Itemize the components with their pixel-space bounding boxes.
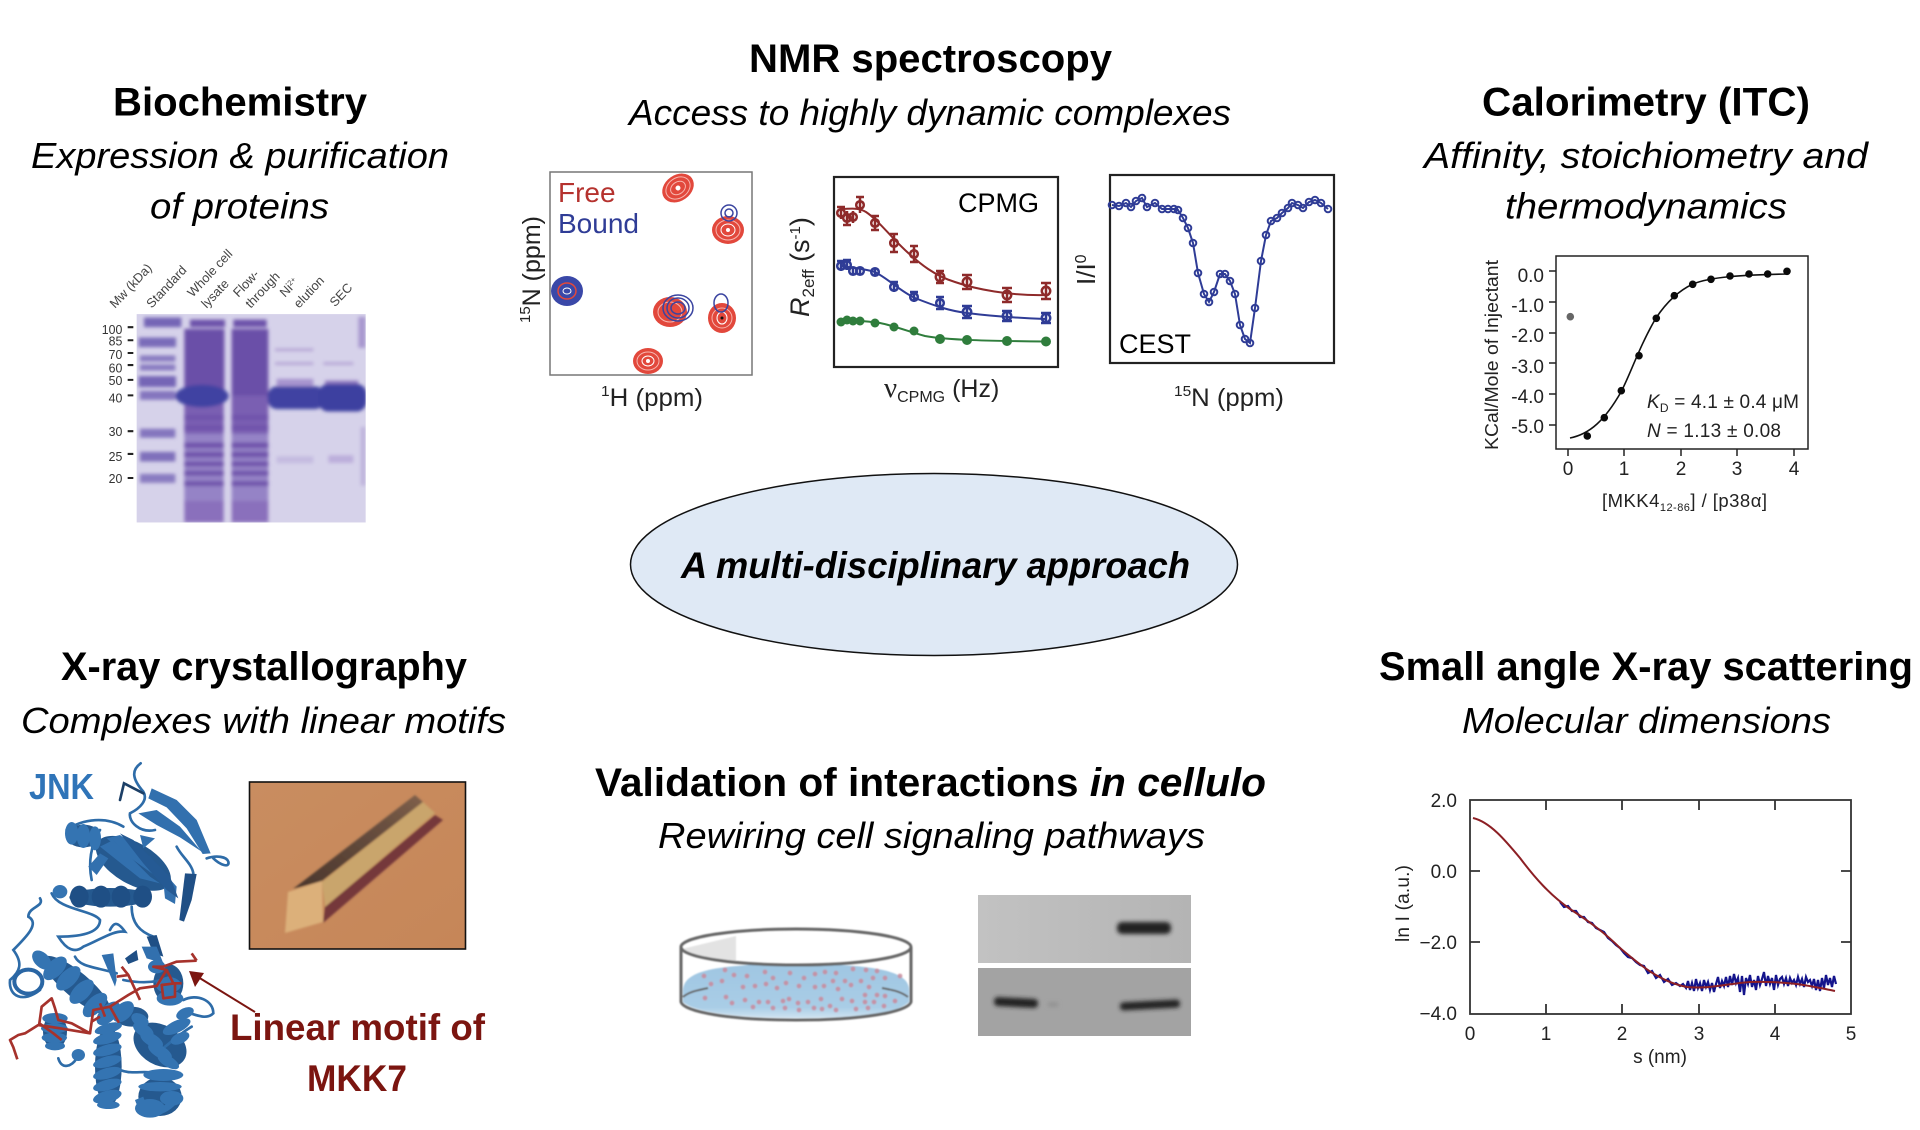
gel molecular-weight labels: 25 [109, 450, 122, 464]
legend: Free [558, 177, 616, 208]
y-axis tick labels: -3.0 [1511, 357, 1544, 378]
y-axis tick labels: −4.0 [1419, 1004, 1457, 1025]
gel lane labels: through [242, 269, 283, 311]
x-axis tick labels: 3 [1694, 1024, 1704, 1045]
legend: Bound [558, 208, 639, 239]
subtitle: rewiring: Rewiring cell signaling pathways [658, 815, 1205, 856]
x-axis tick labels: 2 [1676, 459, 1686, 480]
x-axis label: ν [884, 372, 897, 404]
gel lane labels: 2+ [285, 275, 298, 288]
x-axis tick labels: 0 [1465, 1024, 1475, 1045]
ellipse text: A multi-disciplinary approach [680, 545, 1190, 586]
y-axis tick labels: 0.0 [1518, 266, 1544, 287]
gel molecular-weight labels: 70 [109, 348, 122, 362]
gel lane labels: SEC [327, 280, 355, 310]
icon: petri dish with cells [681, 929, 911, 1020]
subtitle: molecular dimensions: Molecular dimensions [1462, 700, 1831, 741]
heading: X-ray crystallography: X-ray crystallography [61, 645, 468, 689]
x-axis label: (Hz) [945, 375, 999, 403]
linear motif label: Linear motif of [230, 1007, 486, 1048]
chart: CPMG: CPMG [958, 188, 1039, 218]
heading: NMR spectroscopy: NMR spectroscopy [749, 37, 1113, 81]
y-axis label: -1 [787, 226, 804, 239]
x-axis tick labels: 1 [1619, 459, 1629, 480]
heading: Biochemistry: Biochemistry [113, 80, 368, 124]
chart: CPMG [834, 177, 1058, 367]
gel lane labels [107, 246, 355, 311]
western blot [978, 895, 1191, 1036]
subtitle line 2: thermodynamics [1505, 186, 1787, 226]
y-axis label: KCal/Mole of Injectant [1481, 260, 1502, 450]
cells [702, 967, 902, 1012]
central ellipse [630, 474, 1238, 656]
gel image [102, 246, 367, 522]
y-axis tick labels: −2.0 [1419, 933, 1457, 954]
JNK label: JNK [29, 766, 94, 807]
subtitle: linear motifs: Complexes with linear motifs [21, 700, 506, 741]
gel lane labels: Mw (kDa) [107, 260, 155, 311]
blue series [837, 260, 1051, 323]
x-axis tick labels: 5 [1846, 1024, 1856, 1045]
gel molecular-weight labels: 60 [109, 361, 122, 376]
peptide sticks [10, 953, 197, 1059]
x-axis label: CPMG [897, 389, 945, 406]
y-axis tick labels: -5.0 [1511, 417, 1544, 438]
y-axis label: 15 [517, 306, 534, 323]
heading: validation: Validation of interactions in cellulo [595, 761, 1266, 805]
N annotation: N = 1.13 ± 0.08 [1647, 421, 1781, 442]
gel lane labels: lysate [198, 276, 232, 311]
panel: biochemistry [31, 80, 449, 522]
x-axis label: 1 [601, 383, 610, 400]
chart: scattering curve [1419, 791, 1856, 1045]
panel: calorimetry ITC [1422, 80, 1869, 514]
x-axis label: [MKK4 [1602, 490, 1659, 511]
subtitle line 2: of proteins [150, 186, 329, 226]
beta sheets [88, 788, 211, 987]
KD annotation: = 4.1 ± 0.4 μM [1669, 392, 1799, 413]
red series [837, 197, 1051, 302]
y-axis tick labels: -4.0 [1511, 387, 1544, 408]
open helix ring [14, 970, 42, 994]
crystal photo [250, 782, 466, 949]
y-axis label: 0 [1073, 254, 1090, 263]
subtitle: expression and purification: Expression & purification [31, 135, 449, 176]
x-axis tick labels [1563, 459, 1800, 480]
gel lane labels: Whole cell [184, 246, 235, 300]
y-axis tick labels: 0.0 [1431, 862, 1457, 883]
y-axis label: (s [785, 239, 815, 269]
panel: NMR spectroscopy [517, 37, 1334, 412]
x-axis tick labels [1465, 1024, 1856, 1045]
gel molecular-weight labels: 30 [109, 425, 122, 439]
contour peaks [551, 168, 744, 374]
KD annotation: K [1647, 392, 1661, 413]
helices [28, 822, 196, 1118]
noisy data [1560, 902, 1836, 995]
helix backing mass [36, 825, 195, 1116]
chart: CEST: CEST [1119, 329, 1191, 359]
x-axis label: ] / [p38α] [1690, 490, 1767, 511]
x-axis tick labels: 3 [1732, 459, 1742, 480]
x-axis label: 12-86 [1660, 502, 1690, 514]
gel molecular-weight labels [102, 323, 133, 486]
x-axis label: 15 [1174, 383, 1191, 400]
gel lane labels: elution [291, 273, 327, 311]
loops [10, 763, 229, 1073]
dish outline [681, 929, 911, 1020]
protein structure [10, 763, 229, 1118]
heading: Calorimetry (ITC): Calorimetry (ITC) [1482, 80, 1810, 124]
subtitle: dynamic complexes: Access to highly dynamic complexes [627, 92, 1231, 133]
gel molecular-weight labels: 100 [102, 323, 122, 337]
fit curve [1570, 274, 1787, 438]
x-axis label: s (nm) [1633, 1047, 1687, 1068]
chart: HSQC spectrum [550, 168, 752, 375]
green series [836, 316, 1051, 346]
x-axis tick labels: 4 [1789, 459, 1800, 480]
KD annotation: D [1660, 401, 1669, 415]
y-axis tick labels: -2.0 [1511, 326, 1544, 347]
subtitle: affinity: Affinity, stoichiometry and [1422, 135, 1869, 176]
y-axis tick labels: 2.0 [1431, 791, 1457, 812]
y-axis tick labels: -1.0 [1511, 296, 1544, 317]
y-axis tick labels [1511, 266, 1544, 438]
fit curve [1473, 818, 1835, 991]
CEST curve [1109, 195, 1331, 346]
gel lane labels: Flow- [230, 266, 262, 300]
panel: SAXS [1379, 645, 1913, 1068]
x-axis tick labels: 1 [1541, 1024, 1551, 1045]
data points [1566, 268, 1791, 440]
x-axis tick labels: 0 [1563, 459, 1573, 480]
y-axis label: 2eff [799, 269, 818, 298]
gel molecular-weight labels: 85 [109, 334, 122, 348]
gel molecular-weight labels: 20 [109, 472, 122, 486]
x-axis tick labels: 2 [1617, 1024, 1627, 1045]
gel molecular-weight labels: 40 [109, 391, 122, 405]
arrow to linear motif [189, 971, 255, 1012]
gel lane labels: Standard [143, 262, 189, 311]
y-axis label: I/I [1071, 263, 1101, 285]
x-axis tick labels: 4 [1770, 1024, 1781, 1045]
y-axis label: ) [785, 217, 815, 226]
chart: ITC isotherm [1511, 256, 1808, 480]
panel: validation in cellulo [595, 761, 1266, 1036]
y-axis label: N (ppm) [518, 216, 546, 306]
x-axis label: N (ppm) [1191, 384, 1284, 412]
heading: SAXS: Small angle X-ray scattering [1379, 645, 1913, 689]
linear motif label: MKK7 [307, 1058, 407, 1099]
gel molecular-weight labels: 50 [109, 374, 122, 388]
gel lane labels: Ni [277, 281, 295, 300]
y-axis label: ln I (a.u.) [1393, 865, 1414, 942]
x-axis label: H (ppm) [610, 384, 703, 412]
panel: X-ray crystallography [10, 645, 506, 1118]
y-axis tick labels [1419, 791, 1457, 1025]
y-axis label: R [785, 298, 815, 317]
chart: CEST [1109, 175, 1334, 363]
